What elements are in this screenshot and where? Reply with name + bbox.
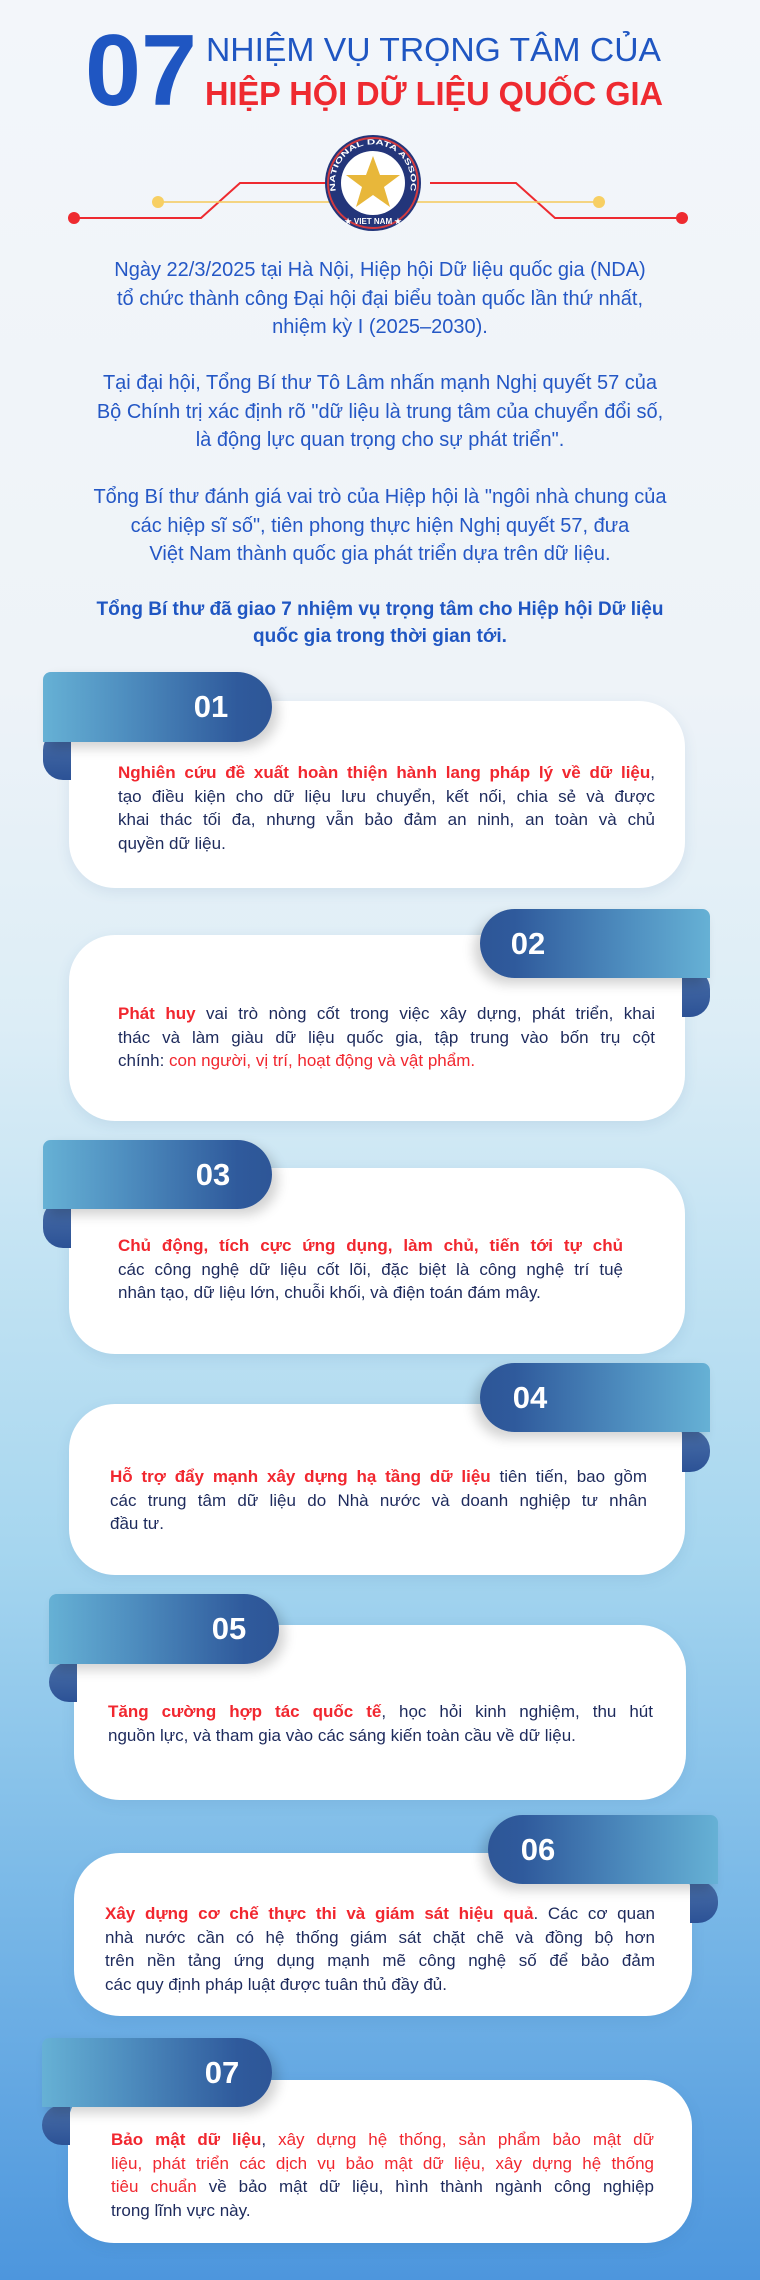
lead heading: Tổng Bí thư đã giao 7 nhiệm vụ trọng tâm cho Hiệp hội Dữ liệu xyxy=(97,599,663,620)
card 02 xyxy=(69,935,685,1121)
tab 06: 06 xyxy=(521,1832,555,1867)
text 01: quyền dữ liệu. xyxy=(118,834,226,853)
intro paragraph 2 xyxy=(97,372,663,451)
text 07 xyxy=(111,2130,654,2220)
title line 2: HIỆP HỘI DỮ LIỆU QUỐC GIA xyxy=(205,74,663,112)
logo emblem: ★ VIET NAM ★ xyxy=(344,217,402,226)
text 02: Phát huy vai trò nòng cốt trong việc xây dựng, phát triển, khai xyxy=(118,1004,655,1023)
text 06: trên nền tảng ứng dụng mạnh mẽ công nghệ số để bảo đảm xyxy=(105,1951,655,1970)
text 04: các trung tâm dữ liệu do Nhà nước và doanh nghiệp tư nhân xyxy=(110,1491,647,1510)
tab 06 xyxy=(488,1815,718,1884)
ribbon curl 01 xyxy=(43,730,71,780)
text 01: tạo điều kiện cho dữ liệu lưu chuyển, kết nối, chia sẻ và được xyxy=(118,787,655,806)
panel: task 05 xyxy=(49,1594,686,1800)
text 01 xyxy=(118,763,655,853)
tab 02 xyxy=(480,909,710,978)
text 02 xyxy=(118,1004,655,1070)
card 01 xyxy=(69,701,685,888)
ribbon curl 04 xyxy=(682,1430,710,1472)
card 06 xyxy=(74,1853,692,2016)
text 05: nguồn lực, và tham gia vào các sáng kiến toàn cầu về dữ liệu. xyxy=(108,1726,576,1745)
ribbon curl 07 xyxy=(42,2105,70,2145)
intro paragraph 2: Bộ Chính trị xác định rõ "dữ liệu là trung tâm của chuyển đổi số, xyxy=(97,400,663,422)
panel: task 04 xyxy=(69,1363,710,1577)
tab 03 xyxy=(43,1140,272,1209)
text 01: khai thác tối đa, nhưng vẫn bảo đảm an ninh, an toàn và chủ xyxy=(118,810,655,829)
intro paragraph 3: các hiệp sĩ số", tiên phong thực hiện Nghị quyết 57, đưa xyxy=(131,514,629,536)
text 02: chính: con người, vị trí, hoạt động và vật phẩm. xyxy=(118,1051,475,1070)
panel: task 02 xyxy=(68,909,710,1126)
panel: task 07 xyxy=(42,2038,692,2243)
intro paragraph 1: tổ chức thành công Đại hội đại biểu toàn quốc lần thứ nhất, xyxy=(117,288,643,310)
text 04 xyxy=(110,1467,647,1533)
text 06: các quy định pháp luật được tuân thủ đầy đủ. xyxy=(105,1975,447,1994)
lead heading: quốc gia trong thời gian tới. xyxy=(253,626,507,647)
intro paragraph 2: Tại đại hội, Tổng Bí thư Tô Lâm nhấn mạnh Nghị quyết 57 của xyxy=(103,372,657,394)
text 07: trong lĩnh vực này. xyxy=(111,2201,251,2220)
tab 01: 01 xyxy=(194,689,228,724)
tab 05 xyxy=(49,1594,279,1664)
tab 04 xyxy=(480,1363,710,1432)
tab 04: 04 xyxy=(513,1380,547,1415)
intro paragraph 3: Tổng Bí thư đánh giá vai trò của Hiệp hội là "ngôi nhà chung của xyxy=(93,486,667,508)
ribbon curl 03 xyxy=(43,1200,71,1248)
text 03 xyxy=(118,1236,623,1302)
card 05 xyxy=(74,1625,686,1800)
ribbon curl 06 xyxy=(690,1881,718,1923)
intro paragraph 1: Ngày 22/3/2025 tại Hà Nội, Hiệp hội Dữ liệu quốc gia (NDA) xyxy=(114,259,646,281)
card 07 xyxy=(68,2080,692,2243)
text 01: Nghiên cứu đề xuất hoàn thiện hành lang pháp lý về dữ liệu, xyxy=(118,763,655,782)
text 02: thác và làm giàu dữ liệu quốc gia, tập trung vào bốn trụ cột xyxy=(118,1028,655,1047)
text 04: Hỗ trợ đẩy mạnh xây dựng hạ tầng dữ liệu tiên tiến, bao gồm xyxy=(110,1467,647,1486)
panel: task 06 xyxy=(74,1815,718,2016)
tab 03: 03 xyxy=(196,1157,230,1192)
text 05: Tăng cường hợp tác quốc tế, học hỏi kinh nghiệm, thu hút xyxy=(108,1702,653,1721)
intro paragraph 3 xyxy=(93,486,667,565)
logo with circuit lines xyxy=(68,135,688,231)
text 03: Chủ động, tích cực ứng dụng, làm chủ, tiến tới tự chủ xyxy=(118,1236,623,1255)
text 07: tiêu chuẩn về bảo mật dữ liệu, hình thành ngành công nghiệp xyxy=(111,2177,654,2196)
intro paragraph 3: Việt Nam thành quốc gia phát triển dựa trên dữ liệu. xyxy=(149,543,611,565)
card 04 xyxy=(69,1404,685,1575)
ribbon curl 05 xyxy=(49,1662,77,1702)
title line 1: NHIỆM VỤ TRỌNG TÂM CỦA xyxy=(206,31,661,68)
panel: task 03 xyxy=(43,1140,686,1358)
intro paragraph 2: là động lực quan trọng cho sự phát triển". xyxy=(196,429,564,451)
text 04: đầu tư. xyxy=(110,1514,164,1533)
ribbon curl 02 xyxy=(682,969,710,1017)
text 06: Xây dựng cơ chế thực thi và giám sát hiệu quả. Các cơ quan xyxy=(105,1904,655,1923)
lead heading xyxy=(96,599,663,647)
text 05 xyxy=(108,1702,653,1745)
text 07: Bảo mật dữ liệu, xây dựng hệ thống, sản phẩm bảo mật dữ xyxy=(111,2130,654,2149)
title xyxy=(85,15,663,120)
tab 07 xyxy=(42,2038,272,2107)
intro paragraph 1 xyxy=(114,259,646,338)
text 06 xyxy=(105,1904,655,1994)
card 03 xyxy=(69,1168,685,1354)
logo emblem xyxy=(325,135,421,231)
tab 01 xyxy=(43,672,272,742)
tab 07: 07 xyxy=(205,2055,239,2090)
text 03: nhân tạo, dữ liệu lớn, chuỗi khối, và điện toán đám mây. xyxy=(118,1283,541,1302)
tab 05: 05 xyxy=(212,1611,246,1646)
text 03: các công nghệ dữ liệu cốt lõi, đặc biệt là công nghệ trí tuệ xyxy=(118,1260,623,1279)
text 07: liệu, phát triển các dịch vụ bảo mật dữ liệu, xây dựng hệ thống xyxy=(111,2154,654,2173)
text 06: nhà nước cần có hệ thống giám sát chặt chẽ và đồng bộ hơn xyxy=(105,1928,655,1947)
tab 02: 02 xyxy=(511,926,545,961)
intro paragraph 1: nhiệm kỳ I (2025–2030). xyxy=(272,316,488,338)
panel: task 01 xyxy=(43,672,687,894)
